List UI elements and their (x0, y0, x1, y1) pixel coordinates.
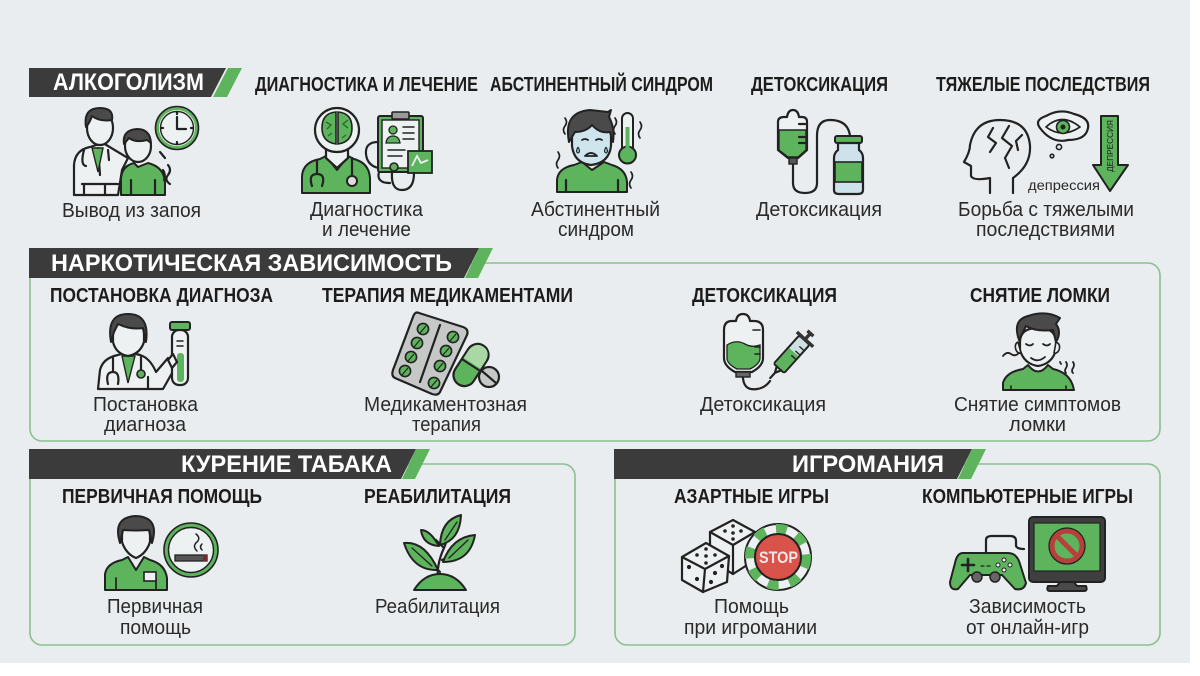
subheading: detox: ДЕТОКСИКАЦИЯ (751, 74, 888, 96)
icon: game controller and monitor (950, 517, 1105, 591)
caption: fighting severe consequences: последствиями (976, 219, 1115, 241)
panel: tobacco smoking (29, 449, 575, 645)
caption: fighting severe consequences: Борьба с тяжелыми (958, 199, 1134, 221)
caption: drug therapy: Медикаментозная (364, 394, 527, 416)
subheading: computer games: КОМПЬЮТЕРНЫЕ ИГРЫ (922, 486, 1133, 508)
caption: detox: Детоксикация (756, 199, 882, 221)
caption: withdrawal from binge: Вывод из запоя (62, 200, 201, 222)
icon: IV bag and vial (778, 110, 863, 194)
icon: relieved man (1003, 313, 1074, 390)
caption: diagnostics: Диагностика (310, 199, 424, 221)
caption: online game addiction (966, 596, 1089, 639)
caption: help with gambling (684, 596, 817, 639)
caption: drug therapy (364, 394, 527, 436)
icon: person with no-smoking sign (105, 516, 218, 590)
caption: withdrawal syndrome (531, 199, 660, 241)
caption: online game addiction: от онлайн-игр (966, 617, 1089, 639)
heading: alcoholism: АЛКОГОЛИЗМ (53, 69, 204, 96)
caption: first aid (107, 596, 203, 639)
caption: first aid: помощь (120, 617, 191, 639)
panel: drug addiction (29, 248, 1160, 441)
label: depression: депрессия (1028, 177, 1100, 193)
panel: alcoholism section (29, 68, 1150, 241)
icon: head, thought cloud and depression arrow (964, 111, 1128, 193)
caption: diagnostics: и лечение (322, 219, 411, 241)
icon: sweating man with thermometer (556, 110, 642, 192)
icon: doctor with patient and clock (74, 106, 198, 195)
icon: dice and stop chip (682, 520, 811, 592)
caption: fighting severe consequences (958, 199, 1134, 241)
caption: making diagnosis: Постановка (93, 394, 199, 416)
heading: tobacco smoking: КУРЕНИЕ ТАБАКА (181, 451, 392, 478)
heading: tobacco smoking (29, 449, 430, 479)
caption: drug therapy: терапия (412, 414, 481, 436)
panel: gambling (614, 449, 1160, 645)
caption: detox: Детоксикация (700, 394, 826, 416)
subheading: first aid: ПЕРВИЧНАЯ ПОМОЩЬ (62, 486, 262, 508)
label: stop: STOP (759, 548, 798, 567)
caption: relieving symptoms: ломки (1009, 414, 1066, 436)
icon: sprout (404, 515, 475, 590)
icon: doctor with test tube (98, 314, 190, 389)
caption: diagnostics (310, 199, 424, 241)
subheading: detox: ДЕТОКСИКАЦИЯ (692, 285, 837, 307)
subheading: rehabilitation: РЕАБИЛИТАЦИЯ (364, 486, 511, 508)
subheading: making diagnosis: ПОСТАНОВКА ДИАГНОЗА (50, 285, 273, 307)
icon: IV bag and syringe (724, 314, 819, 389)
caption: help with gambling: Помощь (714, 596, 789, 618)
caption: relieving symptoms (954, 394, 1121, 436)
subheading: drug therapy: ТЕРАПИЯ МЕДИКАМЕНТАМИ (322, 285, 573, 307)
caption: first aid: Первичная (107, 596, 203, 618)
icon: blister and pills (392, 312, 499, 395)
caption: rehabilitation: Реабилитация (375, 596, 500, 618)
subheading: relieving withdrawal: СНЯТИЕ ЛОМКИ (970, 285, 1110, 307)
caption: relieving symptoms: Снятие симптомов (954, 394, 1121, 416)
caption: withdrawal syndrome: Абстинентный (531, 199, 660, 221)
subheading: gambling games: АЗАРТНЫЕ ИГРЫ (674, 486, 829, 508)
subheading: withdrawal syndrome: АБСТИНЕНТНЫЙ СИНДРОМ (490, 72, 713, 96)
caption: withdrawal syndrome: синдром (558, 219, 634, 241)
subheading: diagnostics and treatment: ДИАГНОСТИКА И ЛЕЧЕНИЕ (255, 74, 478, 96)
caption: online game addiction: Зависимость (969, 596, 1086, 618)
caption: making diagnosis: диагноза (104, 414, 187, 436)
caption: making diagnosis (93, 394, 199, 436)
subheading: severe consequences: ТЯЖЕЛЫЕ ПОСЛЕДСТВИЯ (936, 74, 1150, 96)
caption: help with gambling: при игромании (684, 617, 817, 639)
heading: gambling (614, 449, 986, 479)
icon: doctor with brain, clipboard and stethoscope (302, 108, 432, 193)
heading: drug addiction: НАРКОТИЧЕСКАЯ ЗАВИСИМОСТЬ (51, 250, 452, 277)
label: vertical depression on arrow: ДЕПРЕССИЯ (1106, 120, 1115, 172)
heading: gambling: ИГРОМАНИЯ (792, 451, 944, 478)
